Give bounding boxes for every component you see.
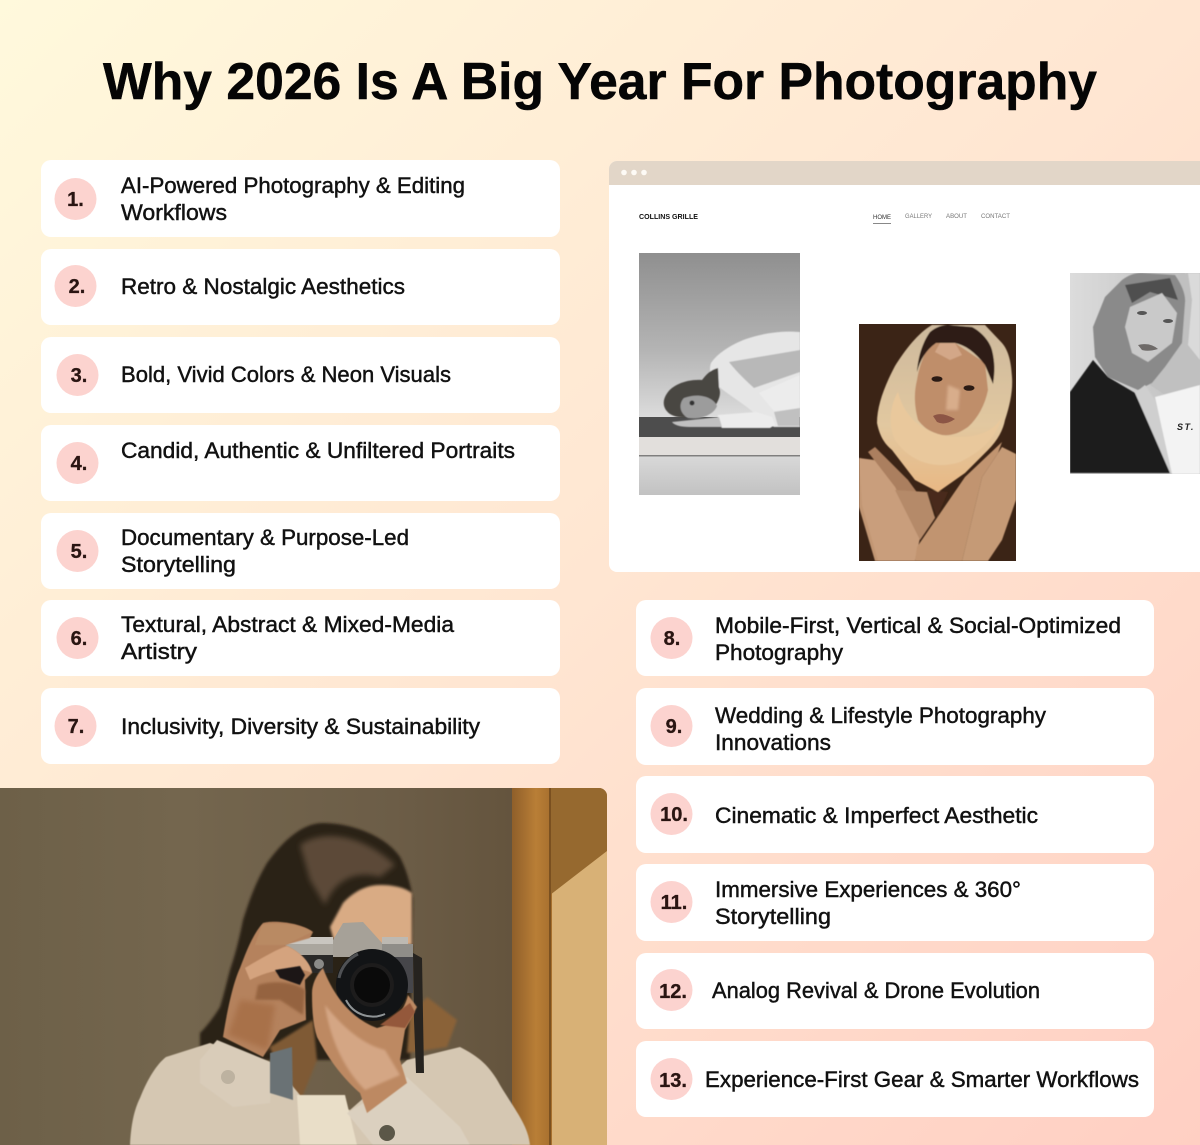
item 9: Wedding & Lifestyle Photography xyxy=(715,703,1046,728)
item 11: Immersive Experiences & 360° xyxy=(715,877,1021,902)
item 10: 10. xyxy=(660,804,688,826)
photo: two women black and white xyxy=(1070,273,1200,474)
item 10: Cinematic & Imperfect Aesthetic xyxy=(715,803,1038,828)
face xyxy=(330,885,412,945)
item 8: Photography xyxy=(715,640,843,665)
right hand xyxy=(312,968,417,1113)
item 9: 9. xyxy=(666,716,682,738)
item 12: Analog Revival & Drone Evolution xyxy=(712,978,1040,1003)
item 8: Mobile-First, Vertical & Social-Optimized xyxy=(715,613,1121,638)
title: Why 2026 Is A Big Year For Photography xyxy=(103,53,1097,111)
item 2: 2. xyxy=(69,276,85,298)
item 7: 7. xyxy=(68,716,84,738)
item 6: Artistry xyxy=(121,639,197,664)
left hand xyxy=(223,922,313,1057)
jacket xyxy=(130,1040,530,1145)
denim cuff xyxy=(270,1047,293,1100)
item 3: Bold, Vivid Colors & Neon Visuals xyxy=(121,362,451,387)
item 1: AI-Powered Photography & Editing xyxy=(121,173,465,198)
item 9 xyxy=(636,688,1154,765)
photo: woman in peach veil xyxy=(859,324,1016,561)
camera xyxy=(280,922,413,1021)
item 1 xyxy=(41,160,560,237)
item 1: Workflows xyxy=(121,200,227,225)
item 12: 12. xyxy=(659,981,687,1003)
item 3 xyxy=(41,337,560,413)
item 4: 4. xyxy=(71,453,87,475)
item 6: Textural, Abstract & Mixed-Media xyxy=(121,612,455,637)
item 2 xyxy=(41,249,560,325)
panel: trends 1 to 7 xyxy=(41,160,560,764)
item 12 xyxy=(636,953,1154,1029)
item 5: Documentary & Purpose-Led xyxy=(121,525,409,550)
site navigation: GALLERY xyxy=(905,213,933,220)
item 11: 11. xyxy=(661,892,687,914)
browser title bar xyxy=(609,161,1200,185)
item 13 xyxy=(636,1041,1154,1117)
item 4: Candid, Authentic & Unfiltered Portraits xyxy=(121,438,515,463)
item 13: Experience-First Gear & Smarter Workflows xyxy=(705,1067,1139,1092)
jacket buttons xyxy=(221,1070,395,1141)
item 7: Inclusivity, Diversity & Sustainability xyxy=(121,714,480,739)
panel: website mockup xyxy=(609,161,1200,572)
item 3: 3. xyxy=(71,365,87,387)
site logo: COLLINS GRILLE xyxy=(639,212,698,221)
item 10 xyxy=(636,776,1154,853)
item 6: 6. xyxy=(71,628,87,650)
photo: two women black and white: ST. xyxy=(1177,422,1195,432)
site navigation: HOME xyxy=(873,214,892,221)
item 11: Storytelling xyxy=(715,904,831,929)
item 8 xyxy=(636,600,1154,676)
camera strap xyxy=(413,953,424,1073)
item 5: 5. xyxy=(71,541,87,563)
item 7 xyxy=(41,688,560,764)
photo: woman resting on mat xyxy=(639,253,800,495)
item 13: 13. xyxy=(659,1070,687,1092)
item 5 xyxy=(41,513,560,589)
item 5: Storytelling xyxy=(121,552,236,577)
site navigation: ABOUT xyxy=(946,213,967,220)
hair xyxy=(200,823,413,1060)
item 1: 1. xyxy=(67,189,84,211)
item 4 xyxy=(41,425,560,501)
wood door frame xyxy=(512,788,607,1145)
hair ends xyxy=(270,997,458,1095)
item 9: Innovations xyxy=(715,730,831,755)
item 6 xyxy=(41,600,560,676)
item 2: Retro & Nostalgic Aesthetics xyxy=(121,274,405,299)
item 11 xyxy=(636,864,1154,941)
photo: woman holding camera xyxy=(0,788,607,1145)
site navigation: CONTACT xyxy=(981,213,1010,220)
item 8: 8. xyxy=(664,628,680,650)
panel: trends 8 to 13 xyxy=(636,600,1154,1117)
browser window xyxy=(609,161,1200,572)
window dots xyxy=(621,170,647,175)
site navigation xyxy=(873,213,1010,224)
